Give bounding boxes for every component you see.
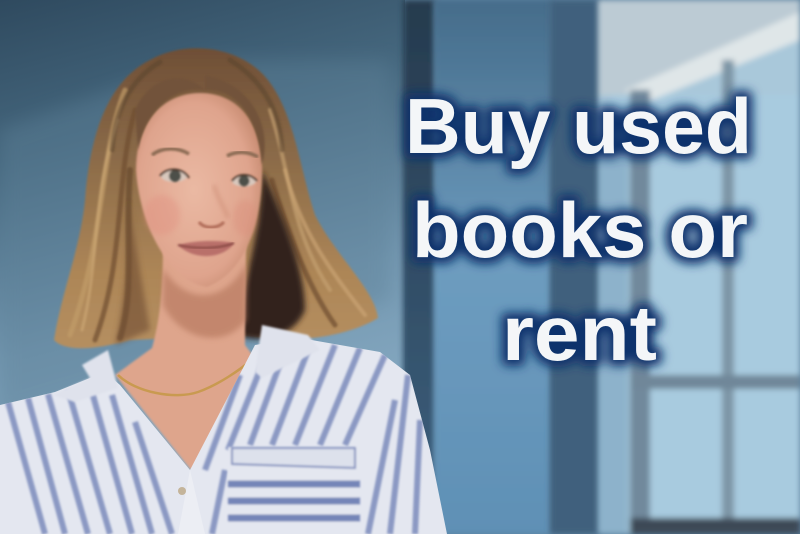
face [136, 93, 262, 287]
caption: Buy used books or rent: rent [502, 289, 657, 377]
hair parting over forehead [135, 78, 205, 150]
mouth [178, 241, 234, 256]
cheeks [144, 195, 180, 235]
hair shadow [235, 170, 305, 339]
caption: Buy used books or rent: rent [502, 289, 657, 377]
caption: Buy used books or rent [405, 82, 752, 377]
nose [199, 222, 224, 227]
eyes [160, 169, 257, 186]
presenter [0, 48, 450, 534]
shirt [0, 330, 450, 534]
window [598, 0, 800, 534]
pocket [228, 447, 360, 534]
brows [152, 149, 189, 155]
collar [52, 350, 118, 402]
caption: Buy used books or rent: books or [412, 186, 748, 274]
neck and chest [115, 240, 262, 475]
hair strands [70, 60, 365, 340]
caption: Buy used books or rent: Buy used [405, 82, 752, 170]
necklace [118, 358, 254, 395]
caption: Buy used books or rent: Buy used [405, 82, 752, 170]
hair back [54, 48, 378, 348]
caption: Buy used books or rent: books or [412, 186, 748, 274]
